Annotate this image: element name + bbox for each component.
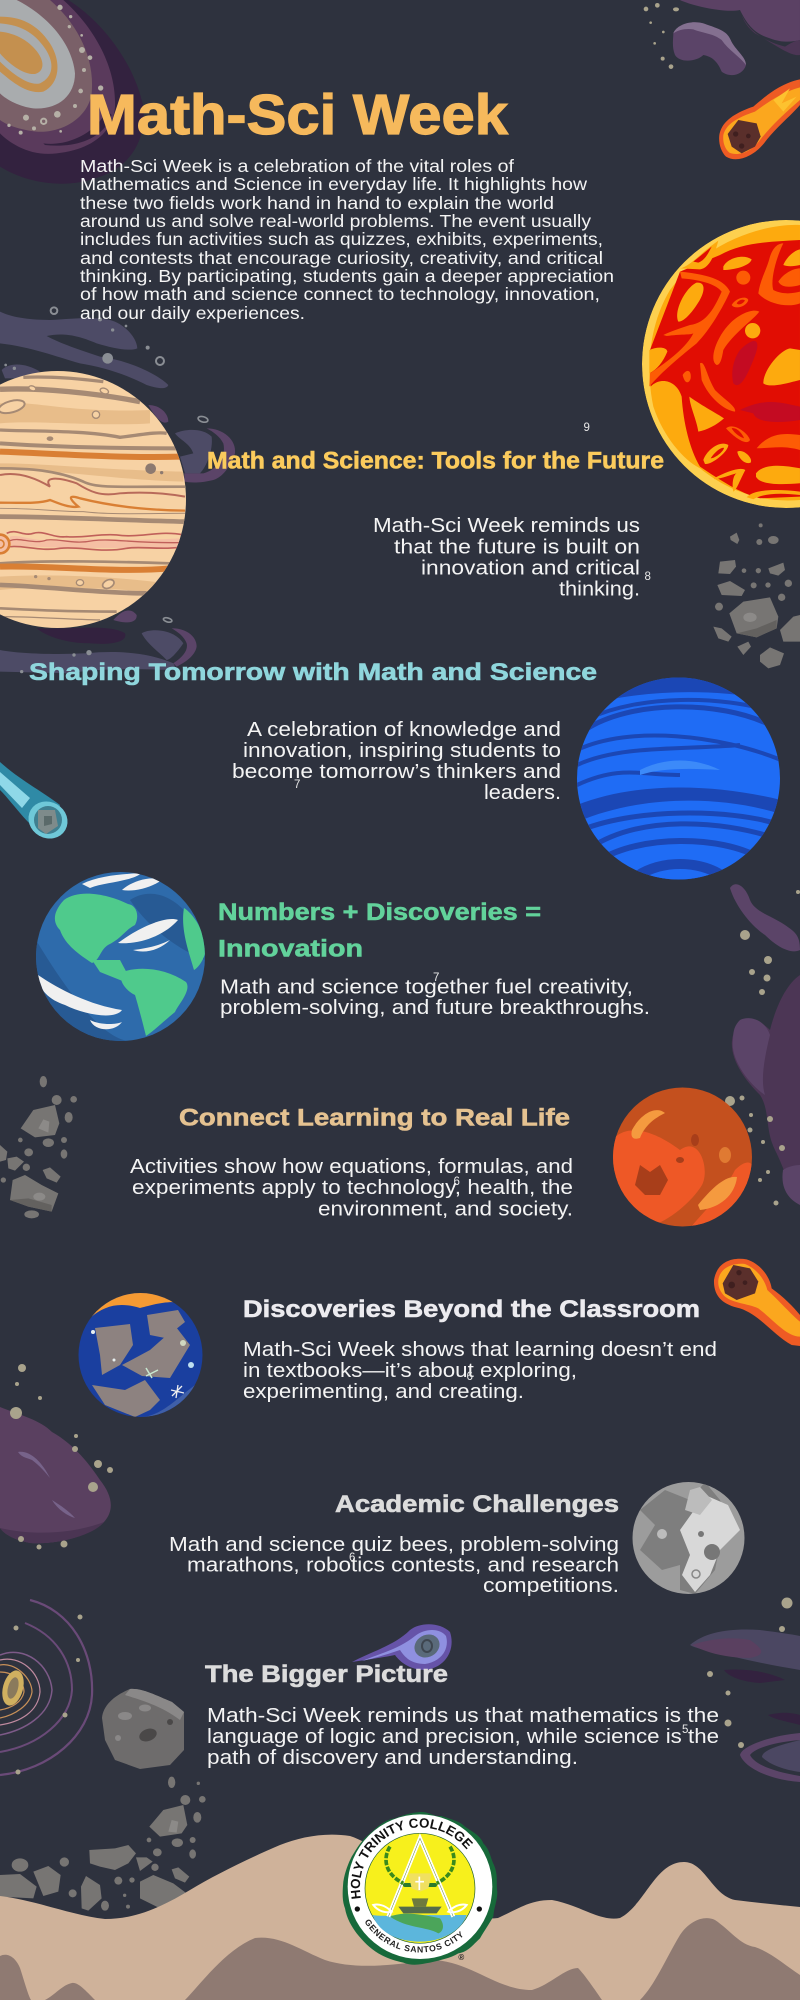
icon: spiral galaxy lower left <box>0 1600 92 1775</box>
text block: connect learning: environment, and society. <box>318 1198 573 1220</box>
text block: introduction: Mathematics and Science in everyday life. It highlights how <box>80 174 587 194</box>
text block: introduction: and our daily experiences. <box>80 303 305 323</box>
text block: introduction <box>80 156 614 323</box>
heading: numbers plus discoveries: Innovation <box>218 936 363 962</box>
text block: introduction: includes fun activities such as quizzes, exhibits, experiments, <box>80 229 603 249</box>
text block: introduction: and contests that encourage curiosity, creativity, and critical <box>80 248 603 268</box>
text block: numbers plus discoveries: Math and science together fuel creativity, <box>220 976 633 998</box>
title: Math-Sci Week <box>87 83 508 147</box>
text block: tools for the future: Math-Sci Week reminds us <box>373 515 640 537</box>
text block: tools for the future <box>373 515 640 600</box>
page number 9: 9 <box>584 422 590 434</box>
icon: purple nebula right <box>725 884 800 1206</box>
icon: nebula lower right <box>690 1598 800 1782</box>
text block: academic challenges: Math and science quiz bees, problem-solving <box>169 1534 619 1556</box>
icon: earth planet <box>36 872 206 1045</box>
text block: shaping tomorrow: A celebration of knowledge and <box>247 719 561 741</box>
icon: grey asteroid <box>102 1689 184 1769</box>
text block: academic challenges: marathons, robotics contests, and research <box>187 1554 619 1576</box>
text block: introduction: Math-Sci Week is a celebration of the vital roles of <box>80 156 514 176</box>
icon: asteroid cluster left <box>0 1076 77 1218</box>
icon: fireball comet lower right <box>714 1259 800 1346</box>
logo: Holy Trinity College seal <box>342 1812 498 1965</box>
text block: shaping tomorrow: innovation, inspiring students to <box>243 740 561 762</box>
text block: academic challenges <box>169 1534 619 1597</box>
icon: ground hills <box>0 1835 800 2000</box>
text block: connect learning: Activities show how equations, formulas, and <box>130 1156 573 1178</box>
text block: academic challenges: competitions. <box>483 1575 619 1597</box>
heading: the bigger picture: The Bigger Picture <box>205 1661 448 1688</box>
text block: discoveries beyond the classroom: experimenting, and creating. <box>243 1381 524 1403</box>
text block: discoveries beyond the classroom: in textbooks—it’s about exploring, <box>243 1360 577 1382</box>
text block: the bigger picture: language of logic and precision, while science is the <box>207 1726 719 1748</box>
heading: numbers plus discoveries: Numbers + Discoveries = <box>218 899 541 926</box>
text block: tools for the future: that the future is built on <box>394 536 640 558</box>
page number 7: 7 <box>433 972 439 984</box>
icon: blue and orange planet <box>78 1292 204 1418</box>
icon: fireball comet top right <box>719 79 800 159</box>
text block: shaping tomorrow <box>232 719 561 804</box>
text block: introduction: around us and solve real-world problems. The event usually <box>80 211 591 231</box>
icon: gas giant planet <box>0 367 187 633</box>
heading: academic challenges: Academic Challenges <box>335 1491 619 1518</box>
text block: shaping tomorrow: leaders. <box>484 782 561 804</box>
text block: introduction: of how math and science connect to technology, innovation, <box>80 284 600 304</box>
logo: Holy Trinity College seal: HOLY TRINITY COLLEGE <box>350 1818 473 1899</box>
icon: lava planet <box>642 220 800 508</box>
icon: purple nebula top right <box>644 0 800 75</box>
text block: connect learning <box>130 1156 573 1220</box>
page number 8: 8 <box>644 571 651 583</box>
icon: blue comet <box>0 762 74 846</box>
text block: introduction: thinking. By participating, students gain a deeper appreciation <box>80 266 614 286</box>
text block: the bigger picture: Math-Sci Week reminds us that mathematics is the <box>207 1705 719 1727</box>
icon: rock pile bottom left <box>0 1777 206 1911</box>
heading: discoveries beyond the classroom: Discoveries Beyond the Classroom <box>243 1296 700 1323</box>
text block: tools for the future: thinking. <box>559 578 640 600</box>
logo: Holy Trinity College seal: GENERAL SANTOS CITY <box>366 1920 462 1952</box>
logo: Holy Trinity College seal: ® <box>458 1953 464 1962</box>
page number 5: 5 <box>682 1724 688 1736</box>
icon: purple asteroid left <box>0 1364 113 1550</box>
heading: connect learning: Connect Learning to Real Life <box>179 1104 570 1132</box>
page number 6: 6 <box>454 1176 460 1188</box>
icon: smoke behind gas planet <box>0 307 235 673</box>
icon: purple comet <box>352 1624 452 1670</box>
page number 6: 6 <box>466 1371 473 1383</box>
page number 6: 6 <box>349 1552 355 1564</box>
text block: the bigger picture <box>207 1705 719 1769</box>
icon: spiral galaxy top left <box>0 0 144 184</box>
text block: discoveries beyond the classroom <box>243 1339 717 1403</box>
text block: numbers plus discoveries: problem-solving, and future breakthroughs. <box>220 997 650 1019</box>
text block: the bigger picture: path of discovery and understanding. <box>207 1747 578 1769</box>
heading: tools for the future: Math and Science: Tools for the Future <box>207 448 664 474</box>
icon: asteroid cluster right <box>713 523 800 668</box>
text block: shaping tomorrow: become tomorrow’s thinkers and <box>232 761 561 783</box>
icon: mars planet <box>612 1087 753 1228</box>
text block: introduction: these two fields work hand in hand to explain the world <box>80 193 554 213</box>
text block: tools for the future: innovation and critical <box>421 558 640 580</box>
icon: moon <box>632 1481 745 1595</box>
text block: discoveries beyond the classroom: Math-Sci Week shows that learning doesn’t end <box>243 1339 717 1361</box>
icon: blue planet <box>577 677 781 881</box>
text block: connect learning: experiments apply to technology, health, the <box>132 1177 573 1199</box>
heading: numbers plus discoveries <box>218 899 541 962</box>
heading: shaping tomorrow: Shaping Tomorrow with Math and Science <box>29 659 597 686</box>
text block: numbers plus discoveries <box>220 976 650 1019</box>
page number 7: 7 <box>294 779 300 791</box>
